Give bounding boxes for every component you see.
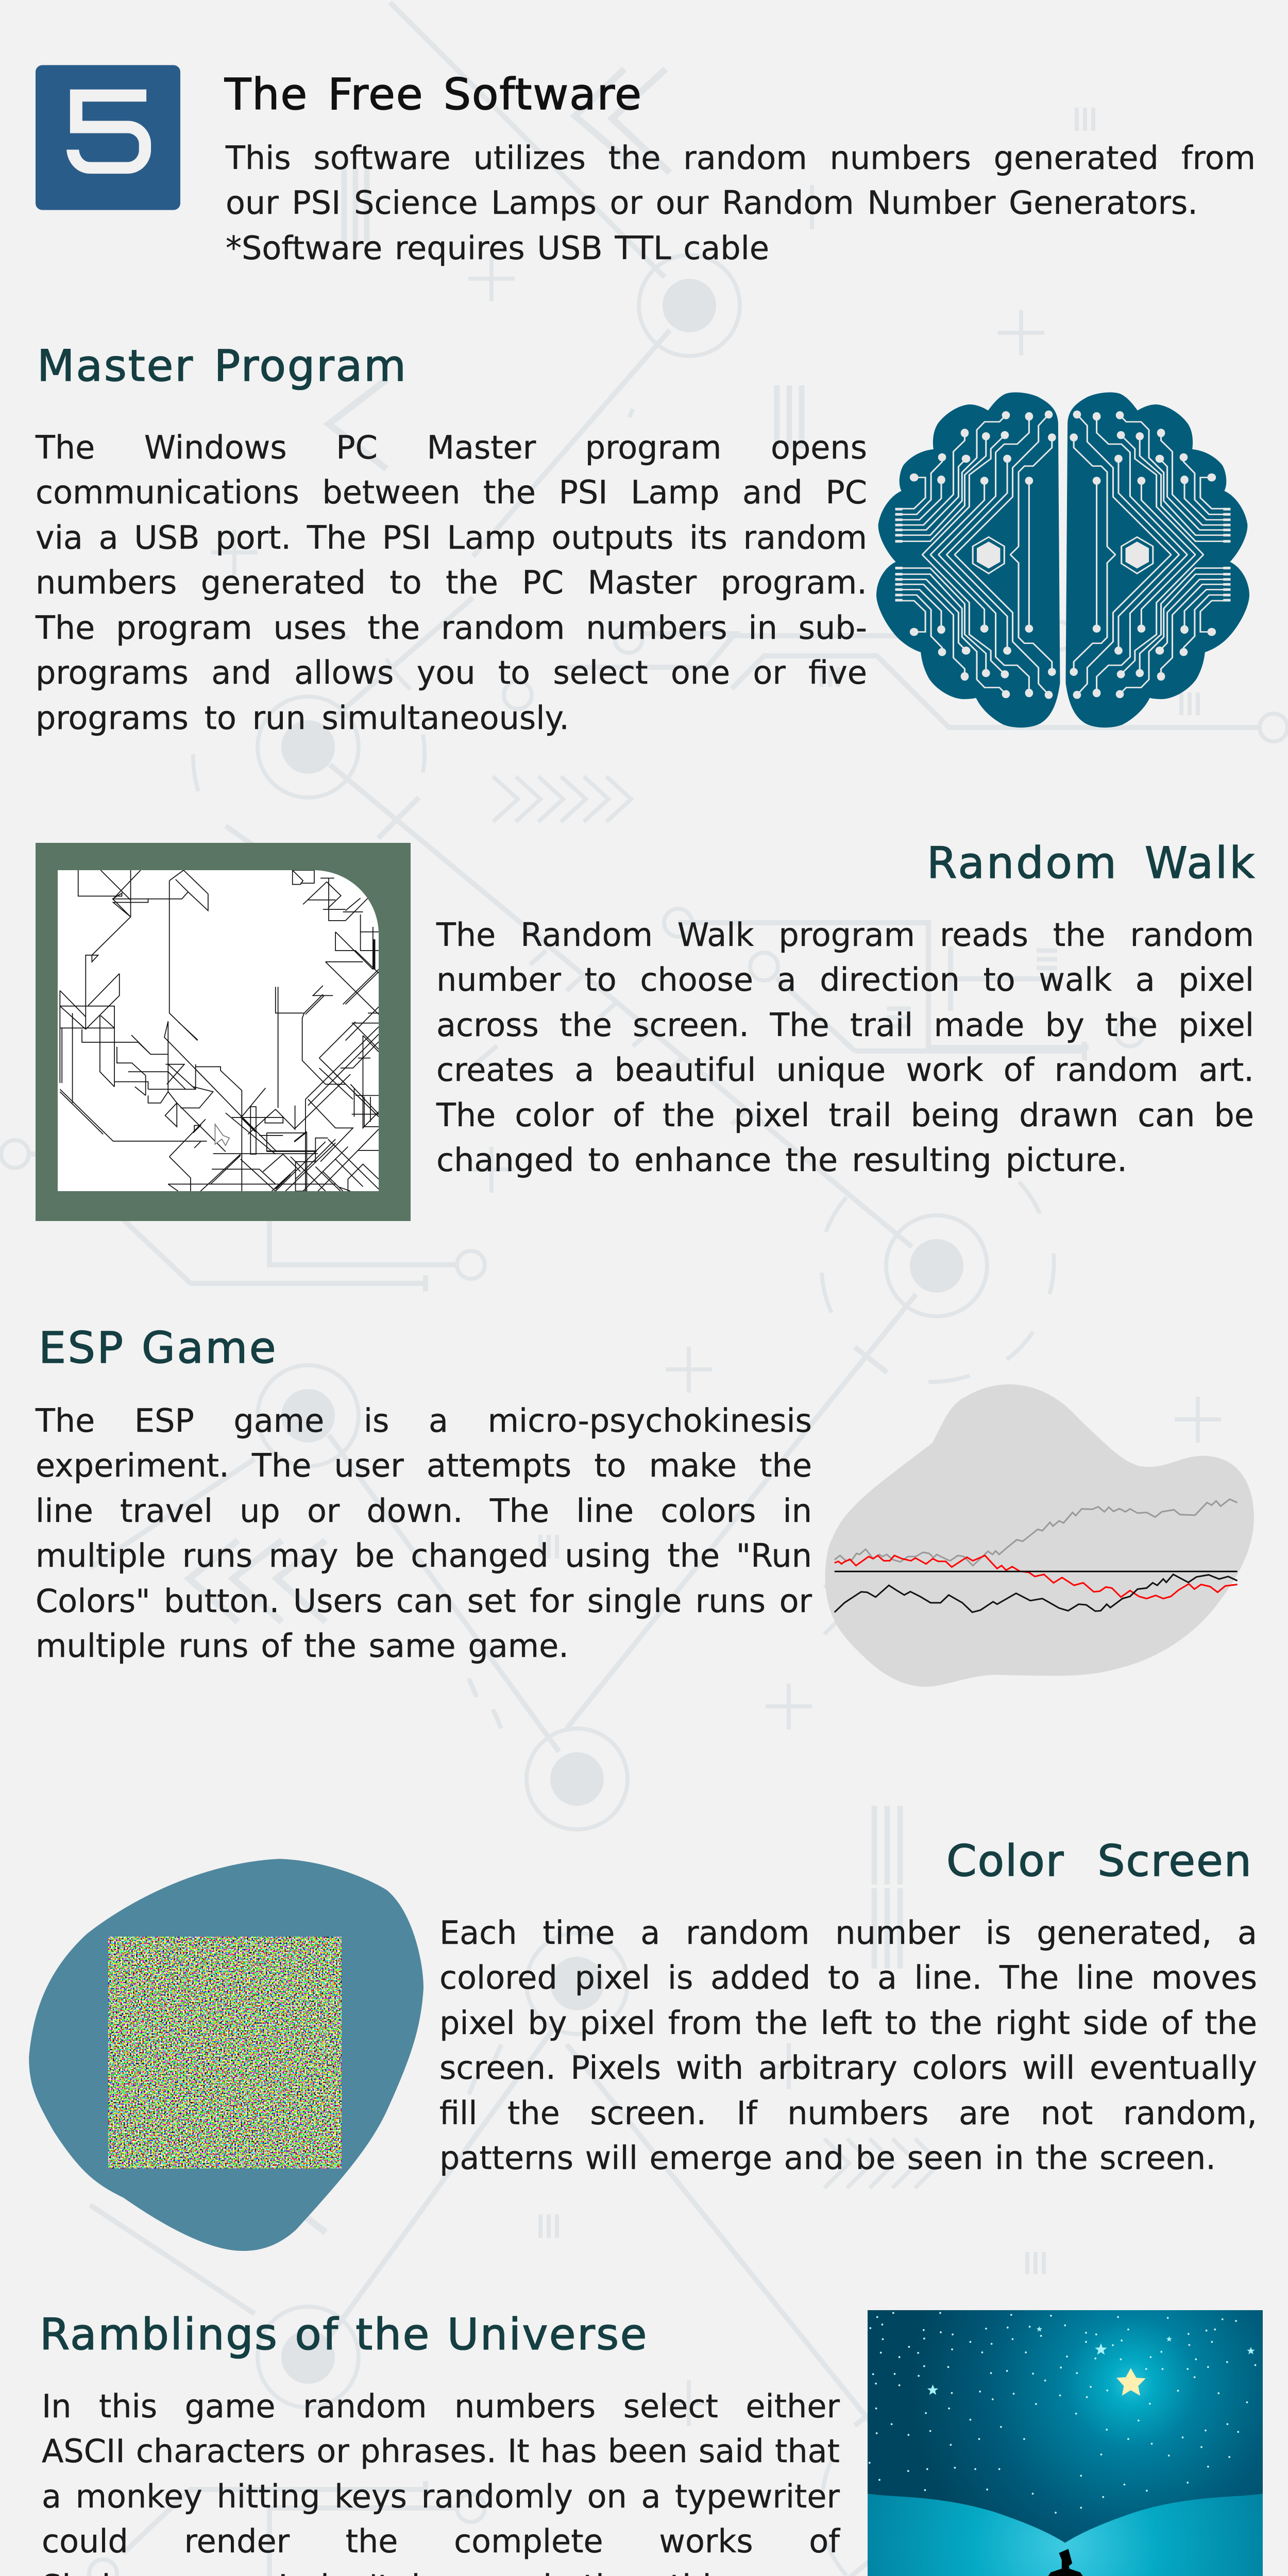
text block: Random Walk description [436,916,1254,1179]
text block: ESP Game description: Colors" button. Users can set for single runs or [36,1582,812,1620]
heading: Ramblings of the Universe: Ramblings of the Universe [40,2309,648,2360]
text block: Master Program description [35,429,867,737]
text block: introduction [226,139,1256,267]
heading: Color Screen: Color Screen [946,1836,1252,1886]
text block: Ramblings description: could render the complete works of [42,2522,840,2560]
text block: introduction: This software utilizes the random numbers generated from [226,139,1256,177]
text block: ESP Game description: multiple runs of the same game. [36,1627,569,1665]
text block: Color Screen description: screen. Pixels with arbitrary colors will eventually [439,2049,1257,2087]
text block: introduction: our PSI Science Lamps or our Random Number Generators. [226,184,1198,222]
icon: number 5 badge [36,65,180,210]
text block: ESP Game description: multiple runs may be changed using the "Run [36,1537,812,1574]
text block: ESP Game description: experiment. The user attempts to make the [36,1447,812,1484]
text block: Random Walk description: changed to enhance the resulting picture. [436,1141,1127,1179]
chart: ESP game line plot on grey blob [825,1384,1254,1687]
text block: Master Program description: numbers generated to the PC Master program. [36,564,867,601]
text block: ESP Game description [35,1402,812,1665]
text block: Random Walk description: creates a beautiful unique work of random art. [436,1051,1254,1089]
chart: random walk trail [58,870,379,1191]
heading: ESP Game: ESP Game [39,1323,278,1373]
text block: Random Walk description: The Random Walk program reads the random [436,916,1254,954]
text block: Color Screen description: Each time a random number is generated, a [439,1914,1257,1952]
heading: Random Walk: Random Walk [927,838,1257,888]
text block: Ramblings description: ASCII characters or phrases. It has been said that [42,2432,840,2470]
text block: Master Program description: programs and allows you to select one or five [36,654,867,691]
chart: random color pixel screen [108,1937,342,2168]
text block: ESP Game description: The ESP game is a micro-psychokinesis [36,1402,812,1439]
text block: introduction: *Software requires USB TTL cable [226,229,769,267]
text block: ESP Game description: line travel up or down. The line colors in [36,1492,812,1530]
text block: Color Screen description: fill the screen. If numbers are not random, [439,2094,1257,2132]
text block: Ramblings description: a monkey hitting keys randomly on a typewriter [42,2478,840,2515]
panel: random walk picture frame [36,843,411,1221]
text block: Color Screen description: patterns will emerge and be seen in the screen. [439,2139,1216,2177]
heading: Master Program: Master Program [37,341,408,391]
text block: Color Screen description: colored pixel is added to a line. The line moves [439,1959,1257,1996]
text block: Random Walk description: number to choose a direction to walk a pixel [436,961,1254,998]
text block: Random Walk description: across the screen. The trail made by the pixel [436,1006,1254,1044]
text block: Color Screen description [439,1914,1257,2177]
text block: Random Walk description: The color of the pixel trail being drawn can be [436,1096,1254,1134]
text block: Master Program description: communications between the PSI Lamp and PC [36,473,867,511]
text block: Master Program description: programs to run simultaneously. [36,699,569,737]
text block: Color Screen description: pixel by pixel from the left to the right side of the [439,2004,1257,2042]
text block: Ramblings description [42,2387,841,2576]
text block: Master Program description: The program uses the random numbers in sub- [36,609,867,647]
panel: color screen noise on teal blob [29,1859,423,2251]
title: The Free Software: The Free Software [225,69,642,120]
text block: Ramblings description: In this game random numbers select either [42,2387,840,2425]
illustration: man looking at starry sky [868,2310,1263,2576]
text block: Master Program description: via a USB port. The PSI Lamp outputs its random [36,519,867,556]
illustration: circuit brain [876,393,1249,727]
text block: Master Program description: The Windows PC Master program opens [36,429,867,466]
